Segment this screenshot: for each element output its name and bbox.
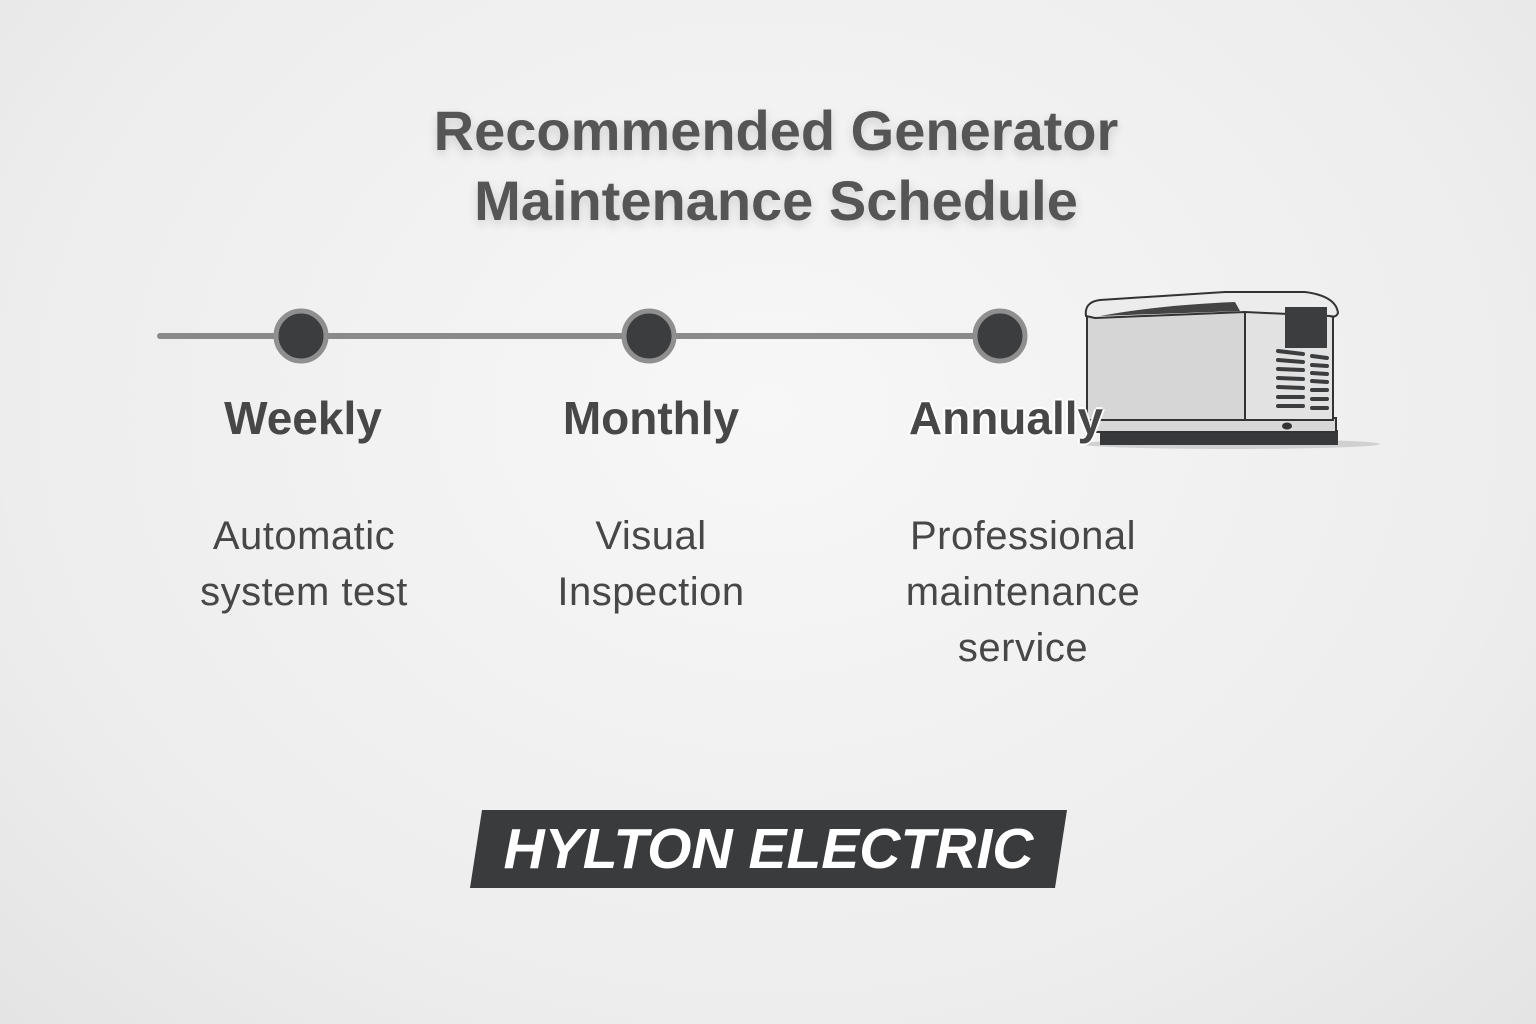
title: Maintenance Schedule — [474, 169, 1078, 232]
desc: annually: maintenance — [906, 570, 1140, 614]
desc: annually: Professional — [910, 514, 1136, 558]
label: weekly: Weekly — [224, 392, 382, 444]
desc: monthly: Inspection — [557, 570, 745, 614]
desc: annually: service — [958, 626, 1088, 670]
desc: monthly — [557, 514, 745, 614]
desc: monthly: Visual — [595, 514, 707, 558]
label: annually: Annually — [909, 392, 1103, 444]
label: monthly: Monthly — [563, 392, 739, 444]
logo: HYLTON ELECTRIC — [504, 817, 1033, 881]
marker: monthly — [624, 311, 674, 361]
title — [434, 99, 1118, 232]
desc: annually — [906, 514, 1140, 670]
desc: weekly: Automatic — [213, 514, 395, 558]
marker: annually — [975, 311, 1025, 361]
desc: weekly — [200, 514, 408, 614]
marker: weekly — [276, 311, 326, 361]
desc: weekly: system test — [200, 570, 408, 614]
title: Recommended Generator — [434, 99, 1118, 162]
